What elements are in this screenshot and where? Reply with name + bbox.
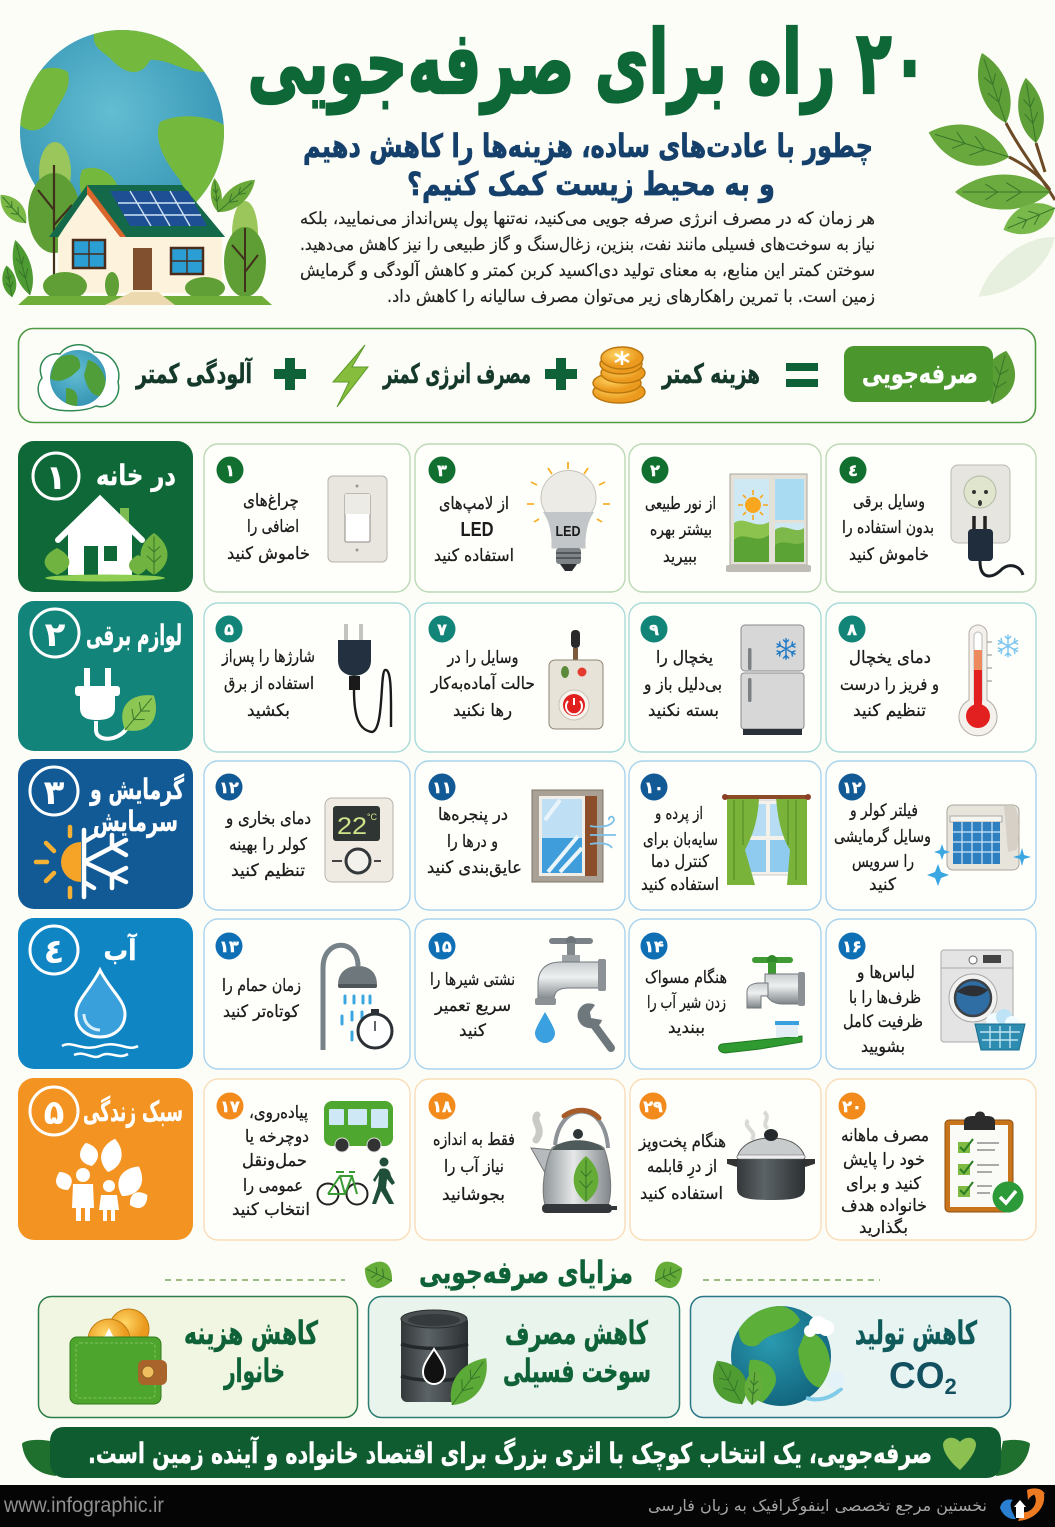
tip text: نیاز آب را [444,1155,504,1177]
badge: ۱۳ [219,937,239,956]
tip text: کنترل دما [651,852,710,872]
badge [216,456,244,484]
tip text: و فریز را درست [840,675,939,695]
tip text: سایه‌بان برای [643,830,718,850]
tip text: رها نکنید [453,701,512,721]
tip text [638,1131,726,1204]
tip text: فیلتر کولر و [849,801,918,821]
icon: plus [545,358,577,390]
benefit panel: lower household cost: خانوار [223,1352,285,1390]
card 9: fridge door [629,603,821,752]
tip text: مصرف ماهانه [841,1126,929,1146]
badge [216,774,242,800]
badge [642,456,668,484]
card 13: shorter shower [204,919,410,1069]
footer bar: نخستین مرجع تخصصی اینفوگرافیک به زبان فارسی [648,1496,987,1516]
tip text: حالت آماده‌به‌کار [430,672,535,694]
icon: sealed window [532,790,616,882]
tip text: ببیرید [663,547,697,567]
tip text: کوتاه‌تر کنید [223,1002,300,1022]
text: less pollution: آلودگی کمتر [135,357,253,390]
tip text [221,647,315,721]
badge [840,456,866,484]
tip text: LED [460,519,494,541]
card 1: turn off lights [204,444,410,592]
tip text: بگذارید [859,1217,908,1238]
tip text [427,805,522,878]
icon: thermostat: °C [367,812,378,822]
tip text: وسایل را در [447,648,518,668]
icon: light switch [328,476,387,562]
icon: LED bulb [527,462,610,571]
section row 4: water [18,918,1036,1069]
tip text: شارژها را پس‌از [221,647,315,667]
tip text [433,1130,515,1205]
card 4: turn off idle devices [826,444,1036,592]
tip text: بکشید [247,701,290,721]
benefits heading [165,1255,880,1293]
icon: washing machine and basket [941,950,1025,1050]
tip text: از نور طبیعی [645,494,716,514]
tip text: انتخاب کنید [232,1200,310,1220]
tip text: کنید [459,1021,487,1041]
badge [640,774,668,800]
icon: footer logo [1000,1488,1045,1521]
tip text: اضافی را [247,517,299,537]
icon: faucet and wrench [535,936,611,1048]
benefit panel: lower household cost: کاهش هزینه [184,1314,318,1352]
card 12: service filters [826,761,1036,910]
benefit panel: lower fossil fuel use [368,1296,680,1418]
icon: wallet with coins [70,1309,167,1404]
badge: ۲۰ [842,1097,862,1116]
tip text [840,648,939,721]
tip text: بسته نکنید [648,701,719,721]
icon: thermometer [959,625,1018,736]
icon: coins [593,347,645,403]
category: at home: در خانه [96,459,176,492]
card 7: avoid standby [415,603,625,752]
badge: ۳ [437,461,447,480]
tip text: بی‌دلیل باز و [643,675,722,695]
badge [428,932,456,960]
category: water [18,918,193,1069]
card 8: fridge temperature [826,603,1036,752]
card 20: monitor monthly use [826,1079,1036,1240]
tip text: از پرده و [654,804,703,824]
panel: savings equation [18,328,1036,422]
tip text: بدون استفاده را [842,518,934,538]
category: at home: ۱ [46,458,66,498]
tip text [843,963,923,1057]
badge: ۹ [649,620,659,639]
badge: ۱۶ [842,937,862,956]
tip text [430,970,515,1041]
intro paragraph: هر زمان که در مصرف انرژی صرفه جویی می‌کنید، نه‌تنها پول پس‌انداز می‌نمایید، بلکه [300,209,875,229]
icon: lightning bolt [333,345,368,407]
badge [216,616,242,642]
tip text: از لامپ‌های [439,494,509,514]
tip text: نشتی شیرها را [430,970,515,990]
category: lifestyle [18,1078,193,1240]
tip text: دمای بخاری و [225,809,311,829]
tip text [834,801,931,895]
badge [838,616,866,642]
intro paragraph: سوختن کمتر این منابع، به معنای تولید دی‌اکسید کربن کمتر و کاهش آلودگی و گرمایش [300,259,875,281]
tip text: ظرفیت کامل [843,1012,923,1032]
card 14: brushing teeth [629,919,821,1069]
category: water: آب [104,933,138,967]
section row 2: appliances [18,601,1036,752]
benefit panel: lower CO2: CO [889,1355,944,1396]
tip text: بیشتر بهره [650,520,712,540]
benefit panel: lower CO2: 2 [944,1374,957,1399]
tip text: پیاده‌روی، [249,1103,308,1123]
text: less energy: مصرف انرژی کمتر [382,359,531,390]
tip text: دوچرخه یا [245,1127,309,1147]
tip text [430,648,535,721]
tip text: ببندید [668,1018,705,1038]
tip text: تنظیم کنید [231,861,305,881]
tip text [842,492,934,565]
tip text: چراغ‌های [243,491,299,511]
card 17: walk, cycle, public transport [204,1079,410,1240]
section row 1: at home [18,441,1036,592]
card 12: heater and cooler temperature [204,761,410,910]
badge: ۱۸ [432,1097,452,1116]
icon: LED bulb: LED [556,523,581,540]
badge: ٤ [848,461,858,480]
card 15: fix leaking faucets [415,919,625,1069]
icon: refrigerator [741,625,804,735]
card 11: insulate windows and doors [415,761,625,910]
badge: ۱۵ [432,937,452,956]
tip text: سریع تعمیر [434,996,511,1016]
benefit panel: lower CO2 [690,1296,1010,1418]
tip text [222,976,301,1022]
icon: air conditioner filter [927,805,1031,886]
badge: ۲ [650,461,660,480]
tip text: بجوشانید [442,1185,505,1205]
icon: oil barrel and leaf [401,1310,497,1413]
tip text [225,809,311,881]
icon: heart leaf [943,1438,976,1470]
icon: sunny window [726,474,811,572]
tip text: زمان حمام را [222,976,301,996]
icon: curtained window [722,794,811,885]
badge [428,1092,456,1120]
tip text: فقط به اندازه [433,1130,515,1150]
card 16: full-load washing [826,919,1036,1069]
badge [428,616,456,642]
tip text [232,1103,310,1220]
subtitle: چطور با عادت‌های ساده، هزینه‌ها را کاهش دهیم [303,127,873,165]
tip text: استفاده کنید [641,875,719,895]
tip text: خود را پایش [843,1150,925,1170]
badge [838,1092,866,1120]
label: savings [844,346,993,402]
category: heating and cooling [18,759,193,909]
category: water: ٤ [44,932,64,972]
tip text: یخچال را [656,648,713,668]
category: at home [18,441,193,592]
tip text: خاموش کنید [849,545,929,565]
tip text: خانواده هدف [841,1196,927,1216]
icon: socket and plug [951,465,1023,576]
icon: plug with cord [338,624,391,732]
tip text [841,1126,929,1238]
tip text: وسایل برقی [853,492,925,512]
tip text: استفاده از برق [224,674,314,694]
intro paragraph: زمین است. با تمرین راهکارهای زیر می‌توان مصرف سالیانه را کاهش داد. [387,287,875,307]
card 10: curtains and shades [629,761,821,910]
subtitle [303,127,873,203]
tip text: ظرف‌ها را با [849,988,921,1008]
badge [428,456,456,484]
tip text: از درِ قابلمه [647,1157,717,1179]
tip text [645,967,727,1038]
category: electrical appliances: لوازم برقی [86,619,182,652]
tip text: دمای یخچال [849,648,931,668]
tip text: بشویید [861,1037,905,1057]
category: heating and cooling: ۳ [44,773,65,813]
closing banner [22,1427,1030,1478]
badge: ۱۴ [644,937,664,956]
icon: kettle [531,1110,617,1213]
tip text: عمومی را [243,1176,303,1196]
tip text: هنگام پخت‌وپز [638,1131,726,1152]
icon: shower and stopwatch [323,945,392,1050]
badge: ۸ [847,620,857,639]
badge: ۱۷ [220,1097,240,1116]
benefits heading: مزایای صرفه‌جویی [419,1255,633,1291]
badge [640,616,668,642]
badge: ۱۲ [842,778,862,797]
intro paragraph: نیاز به سوخت‌های فسیلی مانند نفت، بنزین، زغال‌سنگ و گاز طبیعی را نیز کاهش می‌دهید. [300,234,875,255]
tip text [227,491,310,564]
icon: clipboard checklist [945,1112,1024,1212]
category: electrical appliances: ۲ [45,615,66,655]
tip text: را سرویس [852,852,914,872]
badge [838,932,866,960]
badge: ۱ [225,461,235,480]
subtitle: و به محیط زیست کمک کنیم؟ [407,165,775,203]
section row 5: lifestyle [18,1078,1036,1240]
tip text [645,494,716,567]
tip text: کنید و برای [846,1174,922,1194]
icon: equals [786,363,818,387]
benefit panel: lower household cost [38,1296,358,1418]
card 3: LED lamps [415,444,625,592]
tip text: استفاده کنید [640,1184,723,1204]
badge: ۷ [437,620,447,639]
tip text: عایق‌بندی کنید [427,858,522,878]
badge [428,774,456,800]
icon: standby device [549,630,603,729]
tip text: و درها را [447,832,498,852]
icon: globe in cloud [38,345,119,411]
icon: thermostat [325,798,393,882]
tip text: کنید [869,875,897,895]
badge [216,1092,244,1120]
decoration: leafy branch [923,48,1055,309]
icon: globe with leaves and clouds [712,1306,844,1406]
badge: ۱۱ [432,778,452,797]
card 2: natural light [629,444,821,592]
tip text: در پنجره‌ها [438,805,508,825]
icon: bus, bicycle and walker [318,1101,395,1204]
tip text [434,494,514,566]
card 19: use pot lid [630,1079,821,1240]
icon: thermostat: 22 [337,813,367,840]
tip text: استفاده کنید [434,546,514,566]
tip text: وسایل گرمایشی [834,826,931,847]
tip text: حمل‌ونقل [242,1151,307,1171]
tip text: زدن شیر آب را [647,991,726,1013]
icon: plus [274,358,306,390]
category: heating and cooling: گرمایش و [89,773,184,806]
badge [838,774,866,800]
category: electrical appliances [18,601,193,751]
benefit panel: lower fossil fuel use: سوخت فسیلی [503,1352,651,1390]
tip text: هنگام مسواک [645,967,727,988]
category: lifestyle: سبک زندگی [83,1095,183,1128]
label: savings: صرفه‌جویی [862,359,978,390]
benefit panel: lower CO2: کاهش تولید [855,1314,977,1352]
icon: leaf behind label [977,347,1021,408]
badge [640,1092,666,1120]
footer bar [0,1485,1055,1527]
category: heating and cooling: سرمایش [93,805,178,838]
section row 3: heating and cooling [18,759,1036,910]
illustration: globe and solar house [0,28,272,305]
card 18: boil only needed water [415,1079,625,1240]
badge: ۵ [224,620,234,639]
tip text: لباس‌ها و [856,963,915,983]
icon: faucet and toothbrush [719,955,805,1053]
badge: ۱۲ [219,778,239,797]
text: lower cost: هزینه کمتر [661,359,760,390]
tip text: خاموش کنید [227,544,310,564]
tip text: کولر را بهینه [229,835,308,855]
trees behind the house [28,142,266,297]
benefit panel: lower fossil fuel use: کاهش مصرف [505,1314,648,1352]
category: lifestyle: ۵ [44,1093,64,1133]
badge: ۱۰ [644,778,664,797]
footer bar: www.infographic.ir [3,1494,164,1517]
card 5: unplug chargers [204,603,410,752]
tip text [641,804,719,895]
icon: pot with lid [728,1112,814,1200]
badge [216,932,242,960]
intro paragraph [300,209,875,307]
badge: ۲۹ [643,1097,663,1116]
tip text: تنظیم کنید [853,701,926,721]
tip text [643,648,722,721]
badge [640,932,668,960]
